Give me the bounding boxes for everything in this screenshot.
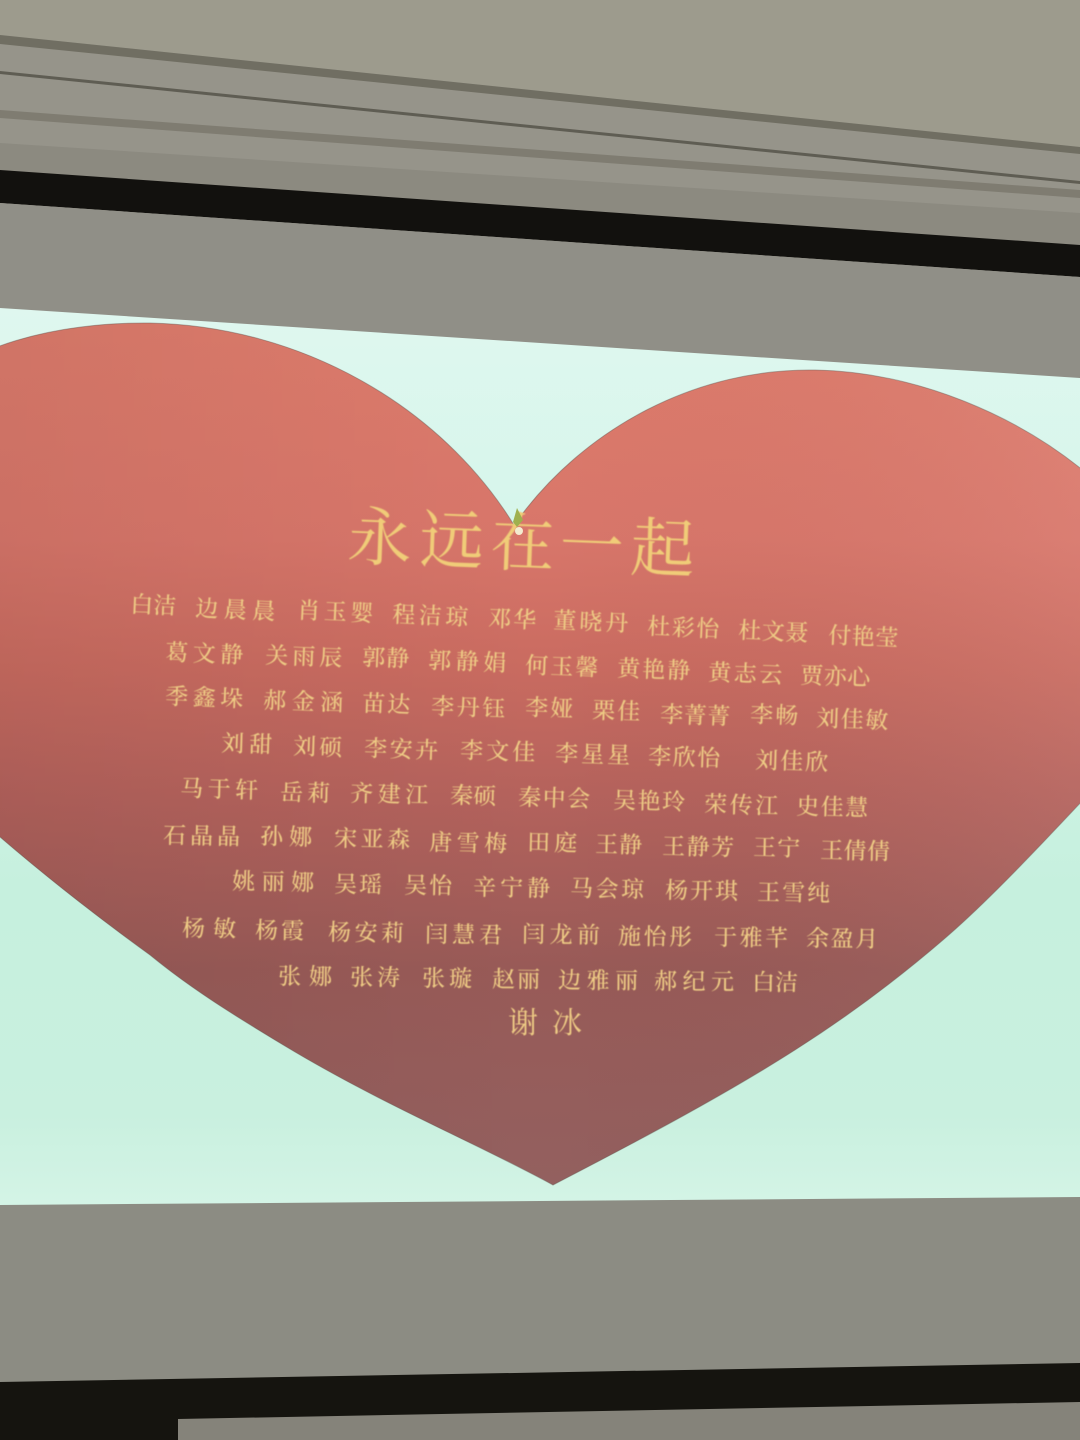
- names row 4: 刘甜: [221, 731, 273, 758]
- ceiling wall: [0, 0, 1080, 300]
- names row 3: 李菁菁: [660, 702, 731, 729]
- names row 7: 马会琼: [570, 876, 645, 902]
- names row 2: 关雨辰: [265, 643, 343, 671]
- names row 4: 李文佳: [460, 738, 536, 765]
- names row 5: 史佳慧: [796, 794, 869, 821]
- names row 1: 白洁: [130, 592, 177, 619]
- names row 5: 荣传江: [704, 792, 778, 819]
- wall below screen: [178, 1402, 1080, 1440]
- names row 8: 杨安莉: [328, 920, 404, 946]
- title: 永远在一起: [346, 502, 696, 586]
- names row 10: 谢冰: [508, 1007, 582, 1040]
- names row 4: 李安卉: [364, 736, 439, 763]
- names row 6: 孙娜: [260, 824, 312, 850]
- names row 5: 秦中会: [518, 785, 590, 812]
- names row 3: 刘佳敏: [816, 706, 889, 734]
- screen lower gray border: [0, 1196, 1080, 1383]
- names row 9: 白洁: [752, 970, 798, 995]
- names row 2: [165, 640, 873, 691]
- names row 4: 李星星: [555, 741, 631, 768]
- names row 2: 黄艳静: [617, 656, 691, 684]
- names row 2: 何玉馨: [525, 653, 599, 681]
- names row 4: 刘佳欣: [755, 748, 829, 775]
- names row 4: [221, 731, 829, 775]
- names row 9: 边雅丽: [558, 968, 638, 994]
- names row 8: 余盈月: [806, 926, 878, 952]
- names row 8: 施怡彤: [618, 924, 692, 950]
- names row 3: 李丹钰: [431, 694, 506, 722]
- icon: laser pointer mark: [513, 508, 523, 535]
- names row 6: [163, 823, 890, 864]
- names row 1: 董晓丹: [553, 608, 629, 636]
- names row 9: [278, 964, 798, 995]
- heart shape: [0, 323, 1080, 1185]
- names row 3: 季鑫垛: [165, 684, 244, 712]
- names row 4: 刘硕: [293, 734, 344, 761]
- names row 7: 吴怡: [404, 873, 453, 899]
- names row 6: 唐雪梅: [429, 830, 507, 857]
- names row 9: 赵丽: [492, 967, 540, 992]
- names row 1: 邓华: [488, 606, 537, 633]
- names row 7: 吴瑶: [334, 872, 382, 898]
- dark screen casing bottom: [0, 1363, 1080, 1440]
- names list: [130, 592, 899, 1040]
- names row 5: 齐建江: [350, 781, 428, 808]
- names row 1: 肖玉婴: [297, 598, 374, 626]
- names row 8: 于雅芊: [714, 925, 788, 951]
- names row 9: 张娜: [278, 964, 332, 989]
- names row 7: 杨开琪: [665, 878, 739, 904]
- names row 1: 杜彩怡: [647, 614, 721, 642]
- names row 4: 李欣怡: [648, 744, 722, 771]
- names row 7: 姚丽娜: [232, 869, 314, 895]
- names row 3: 苗达: [362, 691, 412, 718]
- names row 6: 宋亚森: [334, 826, 410, 853]
- names row 1: 边晨晨: [195, 596, 276, 624]
- dark screen casing top: [0, 170, 1080, 277]
- names row 5: [180, 776, 869, 821]
- names row 9: 郝纪元: [654, 969, 734, 995]
- names row 8: 闫慧君: [425, 922, 502, 948]
- names row 5: 吴艳玲: [613, 788, 685, 815]
- names row 2: 郭静: [362, 645, 410, 672]
- names row 5: 秦硕: [450, 783, 498, 809]
- names row 6: 王静芳: [662, 834, 734, 861]
- names row 6: 田庭: [527, 830, 577, 856]
- names row 6: 王倩倩: [820, 838, 890, 864]
- names row 5: 岳莉: [280, 780, 331, 806]
- names row 1: 杜文聂: [738, 618, 809, 646]
- names row 8: 杨霞: [255, 918, 304, 944]
- names row 3: 李畅: [750, 702, 799, 729]
- names row 2: 葛文静: [165, 640, 244, 668]
- names row 3: 栗佳: [592, 698, 641, 725]
- names row 8: 闫龙前: [522, 922, 600, 948]
- names row 6: 石晶晶: [163, 823, 240, 850]
- names row 9: 张涛: [350, 965, 400, 990]
- names row 3: [165, 684, 889, 734]
- names row 7: 辛宁静: [473, 875, 550, 901]
- names row 1: 付艳莹: [828, 623, 899, 651]
- names row 8: 杨敏: [182, 916, 236, 942]
- names row 3: 郝金涵: [263, 688, 344, 716]
- names row 2: 郭静娟: [428, 648, 507, 676]
- projected slide background: [0, 308, 1080, 1205]
- names row 1: 程洁琼: [392, 602, 470, 630]
- names row 7: [232, 869, 830, 906]
- names row 6: 王静: [595, 832, 642, 858]
- names row 2: 黄志云: [708, 660, 784, 688]
- names row 7: 王雪纯: [757, 880, 830, 906]
- projector housing: [0, 35, 1080, 250]
- names row 5: 马于轩: [180, 776, 258, 803]
- names row 8: [182, 916, 878, 952]
- screen upper gray border: [0, 203, 1080, 380]
- names row 9: 张璇: [422, 966, 472, 991]
- names row 6: 王宁: [753, 835, 800, 861]
- names row 3: 李娅: [525, 695, 574, 722]
- names row 1: [130, 592, 899, 651]
- names row 2: 贾亦心: [800, 663, 873, 691]
